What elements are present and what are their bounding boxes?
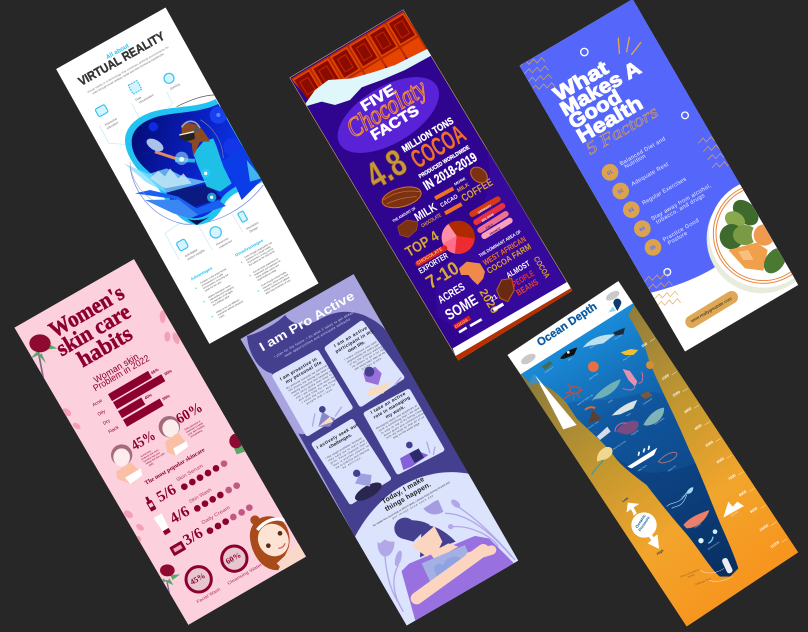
fractions: 3/6 (180, 524, 206, 549)
title: what makes a good health (550, 57, 647, 148)
label: low: Low (621, 496, 629, 503)
card 1: I am proactive in (279, 356, 318, 382)
factors list labels: Adequate Rest (631, 161, 670, 188)
plate (707, 179, 808, 293)
plants (377, 498, 515, 612)
text: produced worldwide: PRODUCED WORLDWIDE (418, 145, 471, 180)
icon: cocoa bean (382, 186, 422, 208)
heading: today i make things happen: things happen. (384, 481, 432, 513)
stat: 60%: 60% (173, 400, 206, 427)
depth scale: 8000 (738, 490, 747, 497)
list: disadvantages: implement and maintain for (254, 259, 282, 277)
text: milk chocolate: CHOCOLATE (420, 212, 443, 229)
card 1: making decisions and keeping up (290, 368, 333, 395)
list: advantages: value for the user (204, 281, 222, 293)
text: milk chocolate (392, 202, 442, 228)
exporter labels: BELGIUM (481, 212, 495, 223)
text: milk chocolate: MILK (412, 200, 440, 224)
flower: bottom (160, 564, 180, 593)
creature labels: Bioluminescent (707, 541, 720, 551)
panel: chocolate facts (289, 9, 573, 361)
list: disadvantages (241, 241, 292, 295)
icon labels: lower row: motion weights (186, 248, 206, 261)
depth scale: 4000 (694, 423, 703, 431)
icon: serum bottle (144, 495, 157, 512)
icons: lower row (176, 211, 248, 251)
depth scale: 2000 (672, 390, 681, 398)
icons: upper row (95, 73, 174, 117)
list: disadvantages: Even though virtual reality (261, 271, 288, 288)
petals (61, 310, 181, 544)
list: disadvantages: motion sickness or fatigue (264, 276, 291, 293)
ocean water (500, 275, 800, 608)
website pill: www.reallygreatsite.com (690, 296, 733, 324)
card 1: my personal life (285, 360, 323, 385)
circle stat: cleansing water: 60% (224, 550, 243, 566)
heading: disadvantages: Disadvantages (234, 237, 265, 258)
text: small labels: 21 (489, 293, 499, 303)
text: acres: ACRES (436, 281, 468, 307)
icon labels: lower row: Immersive (215, 236, 229, 247)
stat: 45%: 45% (129, 428, 159, 454)
heading: advantages: Advantages (190, 265, 214, 282)
icon labels: upper row: education (106, 120, 119, 130)
creature labels: Free diver (614, 333, 623, 341)
list: disadvantages: many smaller users and (255, 264, 280, 279)
list: advantages: Creates a real-world sense (200, 267, 228, 285)
note: 45%: Sunscreen (140, 449, 152, 458)
icon labels: upper row: Interactive (104, 116, 118, 127)
text: small labels: COCOA (454, 317, 469, 329)
connector lines (99, 92, 243, 260)
panel: good health (519, 0, 808, 352)
creature labels: Gulper Eel (667, 464, 677, 472)
bar chart: 40% (143, 392, 153, 401)
bottom text: No matter how much time or effort it takes, I always keep moving forward and (372, 480, 451, 528)
panel: pro active (240, 274, 518, 626)
list: advantages: interesting and engaging (209, 286, 235, 302)
illustration: woman hugging heart (394, 518, 512, 619)
trench callouts: Vehicle (688, 574, 696, 579)
card 4: to stay on top of by being clear (380, 408, 423, 435)
stat: 4.8: 4.8 (358, 141, 414, 197)
list: advantages: of immersion in a safe (201, 273, 224, 287)
depth scale: 7000 (728, 473, 737, 481)
subtitle: woman skin problem: Woman skin (92, 351, 140, 385)
factors list labels: Nutrition (624, 154, 647, 170)
card 3: they help me to learn and (327, 438, 366, 463)
clouds (519, 289, 621, 366)
arrow: up (627, 503, 637, 515)
text: 2020: 2020 (476, 287, 500, 316)
text: exporter: EXPORTER (417, 250, 450, 276)
title: what makes a good health: What (550, 57, 613, 106)
footer band (453, 282, 573, 361)
subtitle: woman skin problem: Problem in 2022 (91, 353, 151, 393)
list: advantages: Makes education more (208, 284, 232, 299)
creature labels: Anglerfish (631, 429, 640, 436)
title: what makes a good health: Health (573, 92, 647, 148)
list: advantages: costs (219, 314, 226, 319)
mountain: everest (528, 373, 577, 429)
exporter labels (477, 204, 502, 236)
card 2: I am an active (333, 325, 368, 348)
icon labels: lower row: Design (249, 225, 259, 234)
icon: chocolate chunk (398, 220, 418, 237)
note: 45%: daily (148, 462, 155, 467)
text: almost block: COCOA (532, 255, 552, 280)
card 3 (314, 422, 388, 504)
icon: chocolate swirl (497, 278, 514, 302)
illustration: girl face (250, 515, 307, 570)
bar chart: Dry (102, 418, 111, 426)
text: top 4: TOP 4 (403, 228, 443, 261)
creature labels: Snailfish (694, 523, 702, 529)
creature labels: Orca (567, 356, 573, 362)
icon: wash tube (154, 513, 172, 536)
factors list labels: Balanced Diet and (619, 136, 667, 167)
icon labels: upper row: Gaming (169, 82, 181, 91)
circle stat: facial wash (186, 567, 222, 604)
icon labels: lower row: Simulation (245, 220, 260, 231)
title: I am Pro Active (257, 289, 357, 354)
text: coffee: COFFEE (459, 176, 495, 205)
illustration: woman left (111, 444, 143, 484)
depth scale: 11000 (770, 540, 780, 549)
depth scale: 10000 (759, 524, 769, 532)
exporter labels: FRANCE (489, 226, 502, 236)
text: almost block: ALMOST (505, 259, 532, 280)
factors list labels: Practice Good (662, 218, 700, 243)
icon labels: lower row: Anti-digital (184, 248, 198, 258)
card 1: I value the most, and for (301, 382, 336, 404)
list: advantages: and abilities alike (212, 295, 231, 307)
circle stat: cleansing water: Cleansing Water (226, 562, 263, 586)
text: chocolate: CHOCOLATE (416, 246, 444, 267)
rating: skin serum: Skin Serum (175, 463, 204, 483)
list: advantages: for learners of all ages (211, 289, 234, 304)
card 4: Managing tasks and deadlines at (375, 403, 418, 430)
circle stat: cleansing water (222, 546, 263, 586)
icon: africa map (459, 262, 485, 285)
icon labels: lower row (185, 222, 259, 260)
depth scale: 500 (641, 342, 648, 348)
note: 60%: important to keep (185, 422, 204, 434)
creature labels: Deep diver (622, 354, 632, 362)
card 3: grow. Every obstacle that I (330, 441, 368, 465)
card 4: I take an active (370, 391, 407, 415)
card 2: of my life without waiting (349, 344, 383, 366)
rating: skin wash (188, 482, 240, 512)
text: coffee (454, 177, 494, 201)
fractions (153, 481, 206, 549)
card 1: people that I love. (305, 387, 334, 405)
card 2: I make choices and take (344, 340, 378, 362)
pie chart (442, 221, 475, 254)
bar chart: Flack (107, 424, 120, 435)
title: what makes a good health: Good (565, 86, 625, 134)
text: west african cocoa farm: COCOA FARM (485, 241, 533, 276)
illustration: woman right (159, 416, 188, 456)
bottom text: get things done each day (391, 493, 434, 520)
factors list numbers: 04 (639, 225, 647, 233)
illustration: VR blob (113, 95, 263, 225)
text: almost block (505, 255, 552, 298)
card 2: journey grows. (360, 356, 383, 372)
card 4: with my team so that all of us (385, 414, 425, 440)
rays (618, 37, 641, 54)
creature labels: Whale Shark (589, 341, 600, 350)
fractions: 4/6 (167, 503, 193, 527)
text: west african cocoa farm: THE DOMINANT AREA OF (478, 229, 522, 258)
circle stat: facial wash: Facial Wash (196, 586, 222, 604)
flower: right (229, 434, 245, 454)
card 1 (275, 353, 350, 433)
bottom section (355, 472, 518, 626)
mountain: scale: Everest (731, 510, 739, 517)
creature labels: Sperm whale (654, 416, 666, 426)
exporter labels: ITALY (485, 223, 494, 230)
title: Ocean Depth (535, 301, 599, 349)
card 4: work is something that I am able (378, 406, 421, 433)
icon labels: upper row (104, 82, 181, 130)
subtitle: users through visual, auditory, tactile and other immersive experiences (91, 52, 165, 95)
factors list numbers: 03 (628, 206, 636, 214)
note: 45%: protects skin from (141, 449, 159, 461)
mountain: scale (723, 502, 744, 518)
factors list labels (619, 136, 716, 248)
icon labels: upper row: Visualization (138, 93, 155, 105)
bar chart: 65% (150, 367, 160, 375)
bar chart: 90% (163, 368, 173, 377)
bar chart: 55% (161, 393, 171, 402)
rating: daily cream (201, 504, 253, 534)
card 1: My attitude towards my personal (285, 363, 328, 390)
panel: skin care habits (14, 259, 307, 625)
title: women's skin care habits (44, 280, 137, 372)
card 2: and enjoy each step as my (354, 350, 387, 371)
icon labels: upper row: Data (135, 95, 142, 102)
factors list numbers (602, 164, 661, 256)
arrow: down (647, 532, 659, 548)
title: VIRTUAL REALITY (76, 29, 168, 89)
creature labels: Whale (608, 399, 614, 404)
text: cocoa: COCOA (405, 118, 471, 174)
title: five: FIVE (358, 82, 399, 115)
subtitle: 5 factors: 5 Factors (582, 102, 662, 158)
panel: ocean depth (500, 275, 800, 627)
card 3: I like tough problems, because (325, 436, 363, 460)
card 4: role in managing (372, 395, 411, 420)
heading: all about: All about (105, 42, 131, 61)
list: advantages: scenarios without physical (217, 300, 244, 317)
note: 60%: Daily skincare is (184, 420, 202, 432)
list: disadvantages: organisations today (257, 268, 278, 282)
title: women's skin care habits: habits (73, 321, 137, 372)
text: 7-10: 7-10 (422, 257, 462, 293)
factors list labels: Posture (667, 231, 689, 247)
card 4: about goals and communicating (383, 410, 426, 437)
rating: daily cream: Daily Cream (201, 505, 231, 526)
creature labels: Japanese spider crab (576, 393, 594, 406)
icon labels: lower row: experience (218, 239, 233, 249)
torn wrapper (306, 48, 432, 106)
creature labels (544, 333, 720, 551)
card 2: own life. (347, 339, 366, 353)
heading: today i make things happen: Today, I make (381, 476, 426, 506)
card 4: my work. (385, 404, 406, 419)
list: advantages: Helps to try out different (216, 299, 240, 314)
list: disadvantages: Even though employees can (244, 241, 273, 259)
note: 45%: keeps the skin safe (145, 452, 166, 465)
text: milk chocolate: THE AMOUNT OF (391, 205, 417, 224)
factors list numbers: 01 (606, 169, 614, 177)
bar chart (91, 367, 173, 435)
card 1: and take time for the things (298, 377, 338, 402)
text: in 2018-2019: IN 2018-2019 (420, 149, 480, 193)
flower: top (29, 334, 57, 378)
text: cacao bands (435, 188, 462, 213)
text: small labels (454, 293, 503, 332)
factors list labels: tobacco, and drugs (655, 193, 706, 226)
card 1: with daily goals that lead to a (293, 370, 336, 397)
exporter labels: GERMANY (477, 204, 492, 215)
pressure badge: Pressure (637, 515, 651, 532)
depth scale: 6000 (716, 457, 725, 464)
exporter list (472, 199, 510, 236)
rating: skin serum (175, 460, 227, 490)
creature labels: RMS Titanic (637, 464, 648, 472)
text: almost block: PEOPLE (510, 268, 536, 289)
pressure badge: Oceanic (634, 513, 647, 529)
card 2 (327, 323, 402, 404)
creature labels: Giant Pacific (588, 372, 599, 381)
text: west african cocoa farm: WEST AFRICAN (481, 235, 528, 267)
icon: iceberg (608, 307, 616, 312)
creature labels: Shark (626, 412, 632, 417)
list: advantages: environment, ensuring the (203, 273, 230, 290)
zigzags (521, 58, 736, 307)
bar chart: Acne (91, 398, 103, 408)
depth scale (641, 338, 787, 549)
list: disadvantages: improves, some users feel (262, 273, 289, 290)
text: cacao bands: CACAO (440, 194, 460, 209)
trench callouts: Challenger Deep (694, 577, 712, 587)
rating: skin wash: Skin Wash (188, 487, 213, 505)
bar chart: Oily (97, 408, 107, 417)
title: women's skin care habits: skin care (52, 299, 135, 361)
text: some: SOME (442, 291, 481, 324)
card 2: participant in my (334, 328, 374, 354)
creature labels: Deep Sea Corals (612, 440, 626, 451)
trench callouts: Deep Submergence (680, 568, 701, 579)
title: chocolaty: Chocolaty (341, 72, 432, 143)
title: women's skin care habits: Women's (44, 280, 129, 343)
decorative rings (581, 48, 688, 275)
card 3: I actively seek out (316, 422, 359, 450)
creature labels: Scuba diver (544, 366, 555, 374)
sea creatures (542, 328, 733, 574)
text: coffee: MORE (453, 176, 467, 187)
circle stat: facial wash: 45% (188, 571, 207, 587)
note: 60%: and glowing (190, 429, 203, 438)
text: coffee: MILK (456, 182, 472, 194)
chocolate bar (291, 11, 427, 100)
card 3: challenges. (328, 432, 353, 449)
subtitle: I plan for the future. I do what it takes to get ahead (274, 310, 354, 359)
creature labels: Jellyfish (681, 494, 688, 499)
list: disadvantages: practice in a virtual reality (245, 245, 272, 262)
list: advantages (195, 267, 246, 319)
card 1: life shows me taking the lead in (288, 366, 331, 393)
title: facts: FACTS (368, 103, 422, 144)
depth scale: 1000 (661, 373, 670, 381)
pressure badge (631, 512, 657, 538)
card 4 (366, 390, 442, 472)
fractions: 5/6 (153, 481, 180, 506)
card 4: stay on the same page (392, 421, 421, 440)
subtitle: seek opportunities and anticipate setbacks (284, 317, 351, 358)
icon: cream box (169, 541, 186, 556)
label: high: High (656, 548, 664, 556)
heading: most popular skincare: The most popular skincare (144, 447, 206, 487)
list: disadvantages: after long sessions of use (265, 279, 292, 295)
card 2: for others to do it for me (351, 347, 385, 369)
factors list numbers: 02 (617, 188, 625, 196)
note: 60%: your skin healthy (188, 424, 206, 436)
icon: map pin (613, 299, 621, 311)
title ellipse (338, 77, 439, 153)
trench callouts (680, 568, 732, 587)
depth scale: 5000 (705, 440, 714, 448)
card 1: life I am happy with each day (295, 374, 337, 400)
card 3: my abilities. (341, 455, 362, 470)
card 3: me to practice and improve (335, 447, 370, 470)
note: 45%: harmful rays and (143, 451, 161, 463)
list: disadvantages: the same as the real world (248, 250, 276, 267)
panel: virtual reality (56, 7, 319, 344)
creature labels: Leatherback (642, 397, 653, 406)
text: almost block: BEANS (514, 277, 540, 298)
factors list numbers: 05 (649, 244, 657, 252)
title: what makes a good health: Makes A (556, 57, 645, 121)
subtitle: Virtual reality is a technology that combines artificial environments for (86, 45, 170, 94)
factors list labels: Regular Exercises (641, 176, 688, 207)
list: disadvantages: Can be quite expensive to (252, 257, 279, 274)
factors list labels: Stay away from alcohol, (650, 183, 713, 222)
creature labels: Volcanic vents (587, 420, 599, 430)
text: million tons: MILLION TONS (400, 116, 456, 155)
depth scale: 9000 (749, 506, 758, 514)
depth scale: 3000 (683, 407, 692, 414)
card 2: responsibility for every part (346, 342, 380, 364)
icon: coffee bean (470, 166, 488, 184)
card 3: face is another chance for (332, 443, 370, 467)
list: disadvantages: environment, it may not be (247, 247, 274, 264)
